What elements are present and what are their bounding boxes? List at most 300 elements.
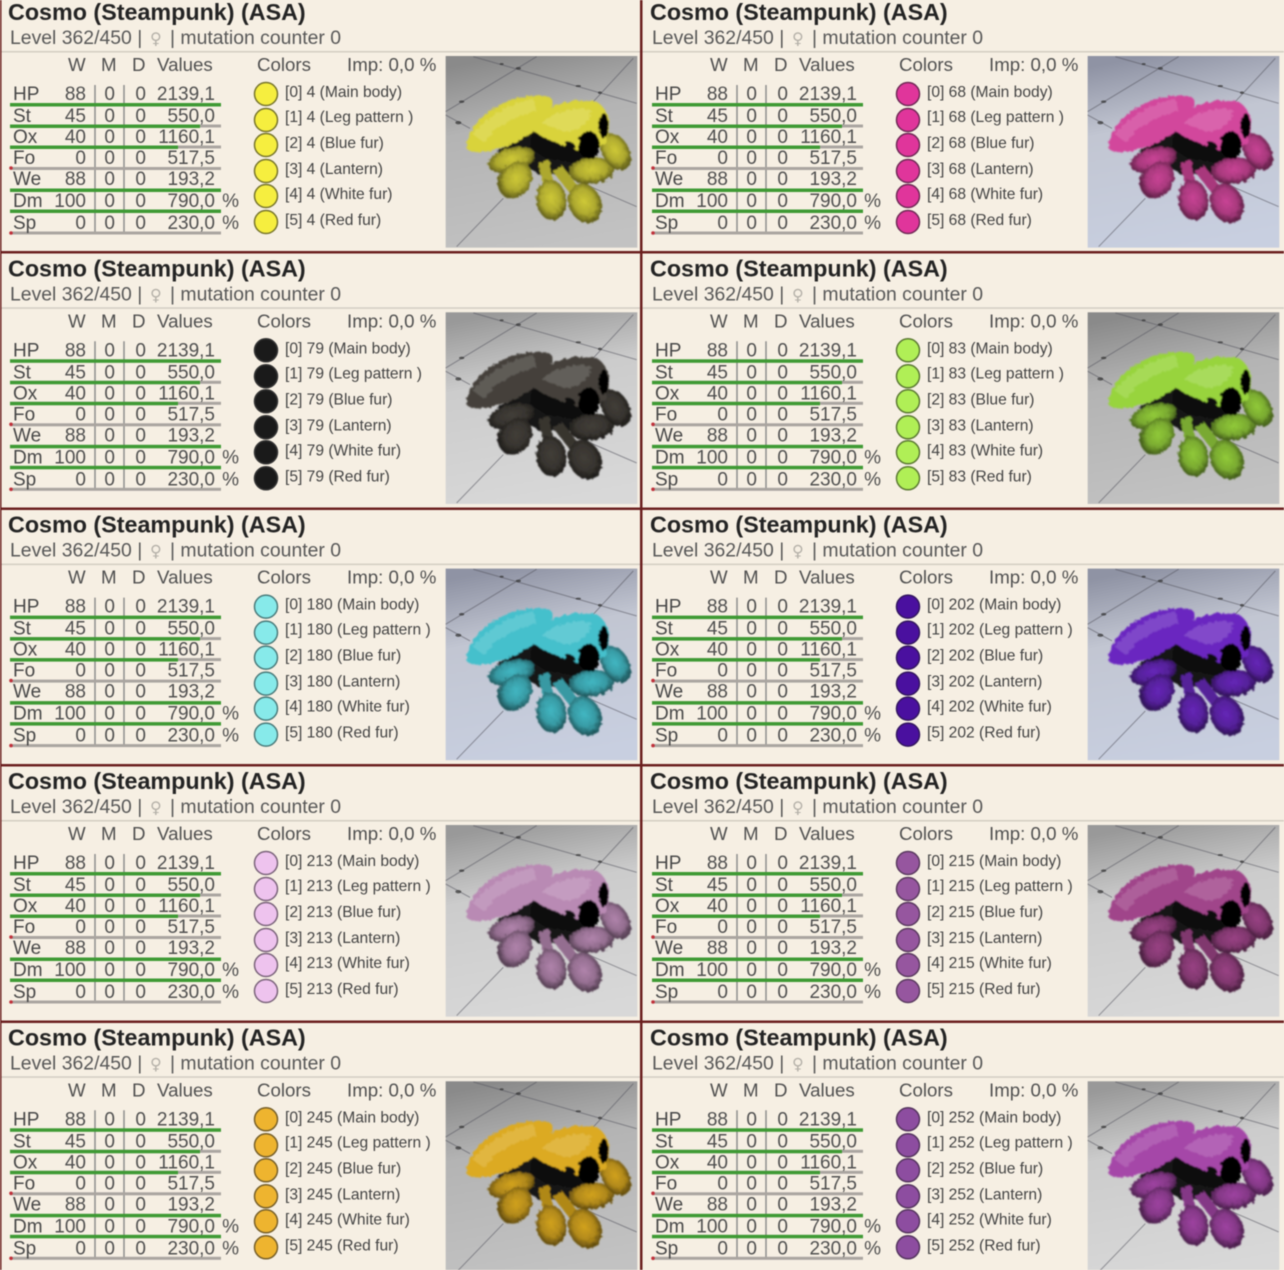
stats table: 88 bbox=[65, 853, 86, 874]
color labels: [3] 215 (Lantern) bbox=[927, 930, 1042, 947]
stats table: HP bbox=[655, 853, 681, 874]
stats table: Dm bbox=[655, 1216, 685, 1237]
column headers: W bbox=[68, 567, 86, 588]
color labels: [4] 213 (White fur) bbox=[285, 955, 410, 972]
stats table: 550,0 bbox=[809, 875, 857, 896]
stats table: Fo bbox=[13, 404, 35, 425]
stats table: St bbox=[655, 875, 674, 896]
stats table bbox=[651, 597, 881, 747]
column headers: M bbox=[101, 310, 117, 331]
creature image: magenta purple bbox=[1088, 1081, 1279, 1270]
stats table: 0 bbox=[746, 682, 757, 703]
color labels: [5] 68 (Red fur) bbox=[927, 212, 1032, 229]
stats table: 0 bbox=[746, 191, 757, 212]
stats table: % bbox=[864, 191, 881, 212]
stats table: 0 bbox=[104, 1173, 115, 1194]
stats table: 517,5 bbox=[167, 917, 215, 938]
stats table: 0 bbox=[777, 1109, 788, 1130]
creature image: amber bbox=[446, 1081, 637, 1270]
stats table: 0 bbox=[135, 896, 146, 917]
level line: | mutation counter 0 bbox=[812, 540, 983, 562]
stats table: 0 bbox=[777, 853, 788, 874]
column headers: Imp: 0,0 % bbox=[347, 54, 436, 75]
stats table: Dm bbox=[655, 704, 685, 725]
column headers: Imp: 0,0 % bbox=[989, 310, 1078, 331]
column headers: Colors bbox=[899, 1079, 953, 1100]
color labels: [0] 79 (Main body) bbox=[285, 340, 411, 357]
stats table: 2139,1 bbox=[799, 340, 857, 361]
stats table: Sp bbox=[13, 469, 36, 490]
stats table: 0 bbox=[104, 84, 115, 105]
stats table: 100 bbox=[54, 960, 86, 981]
stats table: HP bbox=[13, 853, 39, 874]
stats table: 1160,1 bbox=[158, 896, 215, 917]
level line: ♀ bbox=[792, 29, 804, 48]
color swatches bbox=[254, 82, 278, 234]
stats table: 0 bbox=[104, 960, 115, 981]
column headers: W bbox=[710, 310, 728, 331]
stats table: Sp bbox=[655, 982, 678, 1003]
stats table: 0 bbox=[104, 875, 115, 896]
stats table: 0 bbox=[777, 404, 788, 425]
color labels: [5] 180 (Red fur) bbox=[285, 725, 399, 742]
stats table: 88 bbox=[65, 340, 86, 361]
stats table: 88 bbox=[65, 682, 86, 703]
stats table: Sp bbox=[13, 726, 36, 747]
stats table: 100 bbox=[54, 704, 86, 725]
color swatches bbox=[896, 1108, 920, 1259]
stats table: 0 bbox=[777, 960, 788, 981]
stats table: We bbox=[13, 938, 41, 959]
stats table: 1160,1 bbox=[158, 640, 215, 661]
stats table: Ox bbox=[655, 127, 680, 148]
stats table: % bbox=[222, 213, 239, 234]
title: Cosmo (Steampunk) (ASA) bbox=[8, 255, 306, 281]
stats table: Ox bbox=[655, 640, 680, 661]
stats table: 517,5 bbox=[809, 1173, 857, 1194]
color labels: [4] 215 (White fur) bbox=[927, 955, 1052, 972]
color labels: [3] 202 (Lantern) bbox=[927, 674, 1042, 691]
color swatches bbox=[254, 595, 278, 746]
stats table: Fo bbox=[13, 661, 35, 682]
column headers: M bbox=[101, 567, 117, 588]
stats table: 0 bbox=[717, 213, 728, 234]
stats table: 0 bbox=[104, 1238, 115, 1259]
stats table bbox=[651, 1109, 881, 1260]
column headers: Colors bbox=[899, 567, 953, 588]
stats table: Fo bbox=[655, 917, 677, 938]
stats table: 550,0 bbox=[167, 362, 215, 383]
stats table: 45 bbox=[707, 1131, 728, 1152]
stats table: 45 bbox=[65, 875, 86, 896]
stats table: 0 bbox=[135, 917, 146, 938]
stats table: % bbox=[864, 704, 881, 725]
column headers: Values bbox=[799, 567, 855, 588]
column headers: Imp: 0,0 % bbox=[347, 823, 436, 844]
stats table: 0 bbox=[777, 917, 788, 938]
stats table: 0 bbox=[135, 682, 146, 703]
level line: ♀ bbox=[150, 798, 162, 817]
stats table: 0 bbox=[75, 469, 86, 490]
stats table: 0 bbox=[135, 469, 146, 490]
color labels: [1] 180 (Leg pattern ) bbox=[285, 622, 431, 639]
color swatches bbox=[254, 339, 278, 490]
stats table: 0 bbox=[104, 425, 115, 446]
stats table: 88 bbox=[707, 938, 728, 959]
level line: Level 362/450 | bbox=[10, 796, 142, 818]
stats table bbox=[9, 853, 239, 1004]
column headers: Imp: 0,0 % bbox=[989, 1079, 1078, 1100]
stats table: Dm bbox=[13, 447, 43, 468]
stats table: 193,2 bbox=[167, 938, 215, 959]
stats table: 0 bbox=[746, 1216, 757, 1237]
stats table: 1160,1 bbox=[800, 383, 857, 404]
stats table: 88 bbox=[65, 1194, 86, 1215]
stats table: 0 bbox=[135, 661, 146, 682]
stats table: Dm bbox=[655, 960, 685, 981]
stats table: St bbox=[13, 619, 32, 640]
stats table: 790,0 bbox=[809, 960, 857, 981]
color labels bbox=[927, 340, 1064, 485]
stats table bbox=[651, 84, 881, 235]
color labels: [0] 180 (Main body) bbox=[285, 597, 419, 614]
stats table: 0 bbox=[135, 1109, 146, 1130]
stats table: 0 bbox=[135, 127, 146, 148]
column headers: Values bbox=[799, 1079, 855, 1100]
stats table: 0 bbox=[746, 726, 757, 747]
stats table: 0 bbox=[135, 191, 146, 212]
column headers: M bbox=[743, 310, 759, 331]
stats table: 88 bbox=[707, 169, 728, 190]
stats table: 88 bbox=[707, 682, 728, 703]
stats table: 517,5 bbox=[167, 661, 215, 682]
title: Cosmo (Steampunk) (ASA) bbox=[8, 512, 306, 538]
stats table: 0 bbox=[746, 213, 757, 234]
stats table: We bbox=[655, 425, 683, 446]
stats table: 0 bbox=[717, 1173, 728, 1194]
stats table: 0 bbox=[104, 213, 115, 234]
stats table: 40 bbox=[65, 383, 86, 404]
stats table: 0 bbox=[746, 362, 757, 383]
stats table: 0 bbox=[746, 425, 757, 446]
stats table: 550,0 bbox=[809, 362, 857, 383]
color labels bbox=[927, 1109, 1073, 1254]
stats table bbox=[651, 853, 881, 1004]
stats table: 0 bbox=[777, 896, 788, 917]
panel: color 202 violet bbox=[642, 512, 1284, 760]
stats table: Fo bbox=[655, 661, 677, 682]
stats table bbox=[9, 84, 239, 235]
stats table: 193,2 bbox=[167, 1194, 215, 1215]
stats table: 1160,1 bbox=[800, 896, 857, 917]
stats table: % bbox=[222, 469, 239, 490]
stats table: 0 bbox=[75, 726, 86, 747]
level line: | mutation counter 0 bbox=[170, 796, 341, 818]
stats table bbox=[9, 1109, 239, 1260]
stats table: 100 bbox=[54, 1216, 86, 1237]
stats table: 2139,1 bbox=[799, 853, 857, 874]
level line: | mutation counter 0 bbox=[170, 1052, 341, 1074]
color labels: [1] 213 (Leg pattern ) bbox=[285, 878, 431, 895]
stats table: Ox bbox=[655, 1152, 680, 1173]
stats table: 230,0 bbox=[809, 726, 857, 747]
stats table: 0 bbox=[777, 383, 788, 404]
stats table: 0 bbox=[746, 84, 757, 105]
stats table: 45 bbox=[707, 619, 728, 640]
column headers: Values bbox=[799, 54, 855, 75]
stats table: 0 bbox=[135, 84, 146, 105]
color labels: [4] 83 (White fur) bbox=[927, 442, 1043, 459]
stats table: 0 bbox=[777, 469, 788, 490]
stats table: 0 bbox=[777, 1152, 788, 1173]
color labels bbox=[285, 597, 431, 742]
stats table bbox=[9, 597, 239, 747]
stats table: Ox bbox=[13, 383, 38, 404]
stats table: Sp bbox=[655, 213, 678, 234]
stats table: % bbox=[222, 1216, 239, 1237]
stats table: 790,0 bbox=[167, 960, 215, 981]
stats table: Fo bbox=[655, 148, 677, 169]
stats table: 0 bbox=[104, 682, 115, 703]
stats table: Sp bbox=[655, 726, 678, 747]
title: Cosmo (Steampunk) (ASA) bbox=[650, 255, 948, 281]
stats table: 45 bbox=[65, 362, 86, 383]
stats table: 1160,1 bbox=[800, 127, 857, 148]
color labels: [0] 213 (Main body) bbox=[285, 853, 419, 870]
stats table: 0 bbox=[135, 404, 146, 425]
color labels: [1] 83 (Leg pattern ) bbox=[927, 365, 1064, 382]
color labels: [2] 215 (Blue fur) bbox=[927, 904, 1043, 921]
stats table: 2139,1 bbox=[157, 853, 215, 874]
color labels: [1] 68 (Leg pattern ) bbox=[927, 109, 1064, 126]
stats table: 0 bbox=[135, 383, 146, 404]
stats table: 0 bbox=[746, 127, 757, 148]
stats table: 790,0 bbox=[167, 447, 215, 468]
stats table: 0 bbox=[135, 704, 146, 725]
level line: ♀ bbox=[792, 1054, 804, 1073]
column headers: W bbox=[68, 1079, 86, 1100]
color labels: [3] 213 (Lantern) bbox=[285, 930, 400, 947]
color labels: [0] 252 (Main body) bbox=[927, 1109, 1061, 1126]
color labels bbox=[927, 853, 1073, 998]
stats table: 230,0 bbox=[809, 982, 857, 1003]
stats table: Fo bbox=[13, 148, 35, 169]
color labels bbox=[285, 340, 422, 485]
stats table: 0 bbox=[777, 1173, 788, 1194]
stats table: 0 bbox=[777, 938, 788, 959]
stats table: 0 bbox=[746, 469, 757, 490]
color labels: [0] 245 (Main body) bbox=[285, 1109, 419, 1126]
stats table: 0 bbox=[777, 362, 788, 383]
stats table: 0 bbox=[104, 917, 115, 938]
color labels: [0] 4 (Main body) bbox=[285, 84, 402, 101]
level line: ♀ bbox=[792, 798, 804, 817]
stats table: 0 bbox=[746, 1173, 757, 1194]
stats table: 0 bbox=[717, 1238, 728, 1259]
stats table: 0 bbox=[746, 383, 757, 404]
stats table: 517,5 bbox=[809, 661, 857, 682]
stats table: 0 bbox=[746, 1131, 757, 1152]
stats table: 0 bbox=[717, 469, 728, 490]
stats table: Dm bbox=[13, 191, 43, 212]
stats table: 0 bbox=[75, 148, 86, 169]
stats table: 2139,1 bbox=[157, 1109, 215, 1130]
stats table: 0 bbox=[104, 938, 115, 959]
stats table: 0 bbox=[717, 661, 728, 682]
stats table: 0 bbox=[777, 619, 788, 640]
panel: color 180 cyan bbox=[0, 512, 640, 760]
stats table: 0 bbox=[104, 640, 115, 661]
stats table: 517,5 bbox=[809, 404, 857, 425]
stats table: We bbox=[13, 1194, 41, 1215]
stats table: 0 bbox=[777, 447, 788, 468]
color labels: [2] 68 (Blue fur) bbox=[927, 135, 1034, 152]
column headers: Colors bbox=[899, 823, 953, 844]
stats table: 45 bbox=[65, 1131, 86, 1152]
stats table: 0 bbox=[104, 1216, 115, 1237]
stats table: 88 bbox=[707, 425, 728, 446]
stats table: % bbox=[222, 447, 239, 468]
column headers: Colors bbox=[257, 823, 311, 844]
level line: Level 362/450 | bbox=[652, 796, 784, 818]
stats table: Fo bbox=[13, 1173, 35, 1194]
stats table: 550,0 bbox=[809, 106, 857, 127]
column headers: M bbox=[743, 1079, 759, 1100]
level line: | mutation counter 0 bbox=[812, 27, 983, 49]
column headers: M bbox=[101, 1079, 117, 1100]
color labels: [2] 252 (Blue fur) bbox=[927, 1160, 1043, 1177]
stats table: % bbox=[864, 447, 881, 468]
stats table: 0 bbox=[104, 726, 115, 747]
stats table: 0 bbox=[777, 213, 788, 234]
level line: | mutation counter 0 bbox=[170, 283, 341, 305]
color labels: [4] 245 (White fur) bbox=[285, 1211, 410, 1228]
column headers: W bbox=[68, 54, 86, 75]
color swatches bbox=[254, 852, 278, 1002]
stats table bbox=[9, 340, 239, 491]
color labels: [2] 180 (Blue fur) bbox=[285, 648, 401, 665]
column headers: D bbox=[774, 54, 788, 75]
stats table: St bbox=[13, 106, 32, 127]
color labels: [0] 215 (Main body) bbox=[927, 853, 1061, 870]
stats table: 517,5 bbox=[167, 404, 215, 425]
stats table: 0 bbox=[104, 469, 115, 490]
creature image: pink bbox=[1088, 56, 1279, 248]
stats table: 0 bbox=[777, 982, 788, 1003]
stats table: 40 bbox=[65, 896, 86, 917]
color labels: [3] 79 (Lantern) bbox=[285, 417, 392, 434]
stats table: 100 bbox=[696, 1216, 728, 1237]
stats table: 193,2 bbox=[809, 682, 857, 703]
stats table: % bbox=[864, 982, 881, 1003]
stats table: 0 bbox=[777, 106, 788, 127]
stats table: 517,5 bbox=[809, 917, 857, 938]
stats table: 88 bbox=[707, 84, 728, 105]
stats table: 0 bbox=[135, 1216, 146, 1237]
stats table: Sp bbox=[13, 213, 36, 234]
column headers: Colors bbox=[899, 54, 953, 75]
stats table: 0 bbox=[135, 938, 146, 959]
color swatches bbox=[896, 82, 920, 234]
stats table: % bbox=[864, 960, 881, 981]
stats table: 45 bbox=[707, 106, 728, 127]
stats table: Sp bbox=[655, 469, 678, 490]
creature image: cyan bbox=[446, 569, 637, 760]
stats table: 88 bbox=[65, 425, 86, 446]
stats table: 0 bbox=[746, 917, 757, 938]
stats table: HP bbox=[13, 597, 39, 618]
color labels: [5] 213 (Red fur) bbox=[285, 981, 399, 998]
stats table bbox=[651, 340, 881, 491]
stats table: HP bbox=[13, 84, 39, 105]
stats table: 193,2 bbox=[809, 169, 857, 190]
stats table: St bbox=[13, 1131, 32, 1152]
stats table: We bbox=[655, 682, 683, 703]
title: Cosmo (Steampunk) (ASA) bbox=[650, 1024, 948, 1050]
level line: Level 362/450 | bbox=[10, 1052, 142, 1074]
stats table: 88 bbox=[65, 597, 86, 618]
stats table: 88 bbox=[65, 84, 86, 105]
column headers: Values bbox=[157, 567, 213, 588]
color swatches bbox=[254, 1108, 278, 1259]
level line: Level 362/450 | bbox=[10, 283, 142, 305]
panel: color 215 purple bbox=[642, 768, 1284, 1017]
column headers: D bbox=[774, 1079, 788, 1100]
stats table: 230,0 bbox=[809, 469, 857, 490]
stats table: 0 bbox=[746, 704, 757, 725]
stats table: Ox bbox=[13, 127, 38, 148]
stats table: 0 bbox=[135, 106, 146, 127]
stats table: 550,0 bbox=[167, 1131, 215, 1152]
stats table: % bbox=[864, 726, 881, 747]
stats table: HP bbox=[655, 84, 681, 105]
stats table: 0 bbox=[746, 853, 757, 874]
stats table: 517,5 bbox=[167, 148, 215, 169]
column headers: Imp: 0,0 % bbox=[989, 54, 1078, 75]
stats table: 790,0 bbox=[809, 704, 857, 725]
stats table: 0 bbox=[104, 148, 115, 169]
color swatches bbox=[896, 339, 920, 490]
column headers: D bbox=[132, 310, 146, 331]
stats table: Dm bbox=[13, 704, 43, 725]
stats table: 0 bbox=[777, 640, 788, 661]
level line: Level 362/450 | bbox=[10, 27, 142, 49]
stats table: 0 bbox=[75, 213, 86, 234]
column headers: W bbox=[710, 1079, 728, 1100]
stats table: 2139,1 bbox=[157, 597, 215, 618]
stats table: 0 bbox=[746, 661, 757, 682]
stats table: Ox bbox=[655, 383, 680, 404]
column headers: Imp: 0,0 % bbox=[347, 310, 436, 331]
color labels bbox=[285, 853, 431, 998]
stats table: 550,0 bbox=[809, 1131, 857, 1152]
level line: ♀ bbox=[150, 285, 162, 304]
column headers: W bbox=[710, 823, 728, 844]
stats table: 790,0 bbox=[809, 1216, 857, 1237]
color labels: [0] 83 (Main body) bbox=[927, 340, 1053, 357]
stats table: 88 bbox=[707, 340, 728, 361]
color labels: [2] 79 (Blue fur) bbox=[285, 391, 392, 408]
title: Cosmo (Steampunk) (ASA) bbox=[8, 768, 306, 794]
stats table: 790,0 bbox=[167, 1216, 215, 1237]
column headers: Values bbox=[157, 1079, 213, 1100]
stats table: 230,0 bbox=[809, 213, 857, 234]
color labels: [4] 4 (White fur) bbox=[285, 186, 392, 203]
stats table: 0 bbox=[104, 853, 115, 874]
panel: color 213 light pink bbox=[0, 768, 640, 1017]
stats table: % bbox=[222, 726, 239, 747]
stats table: 0 bbox=[104, 982, 115, 1003]
